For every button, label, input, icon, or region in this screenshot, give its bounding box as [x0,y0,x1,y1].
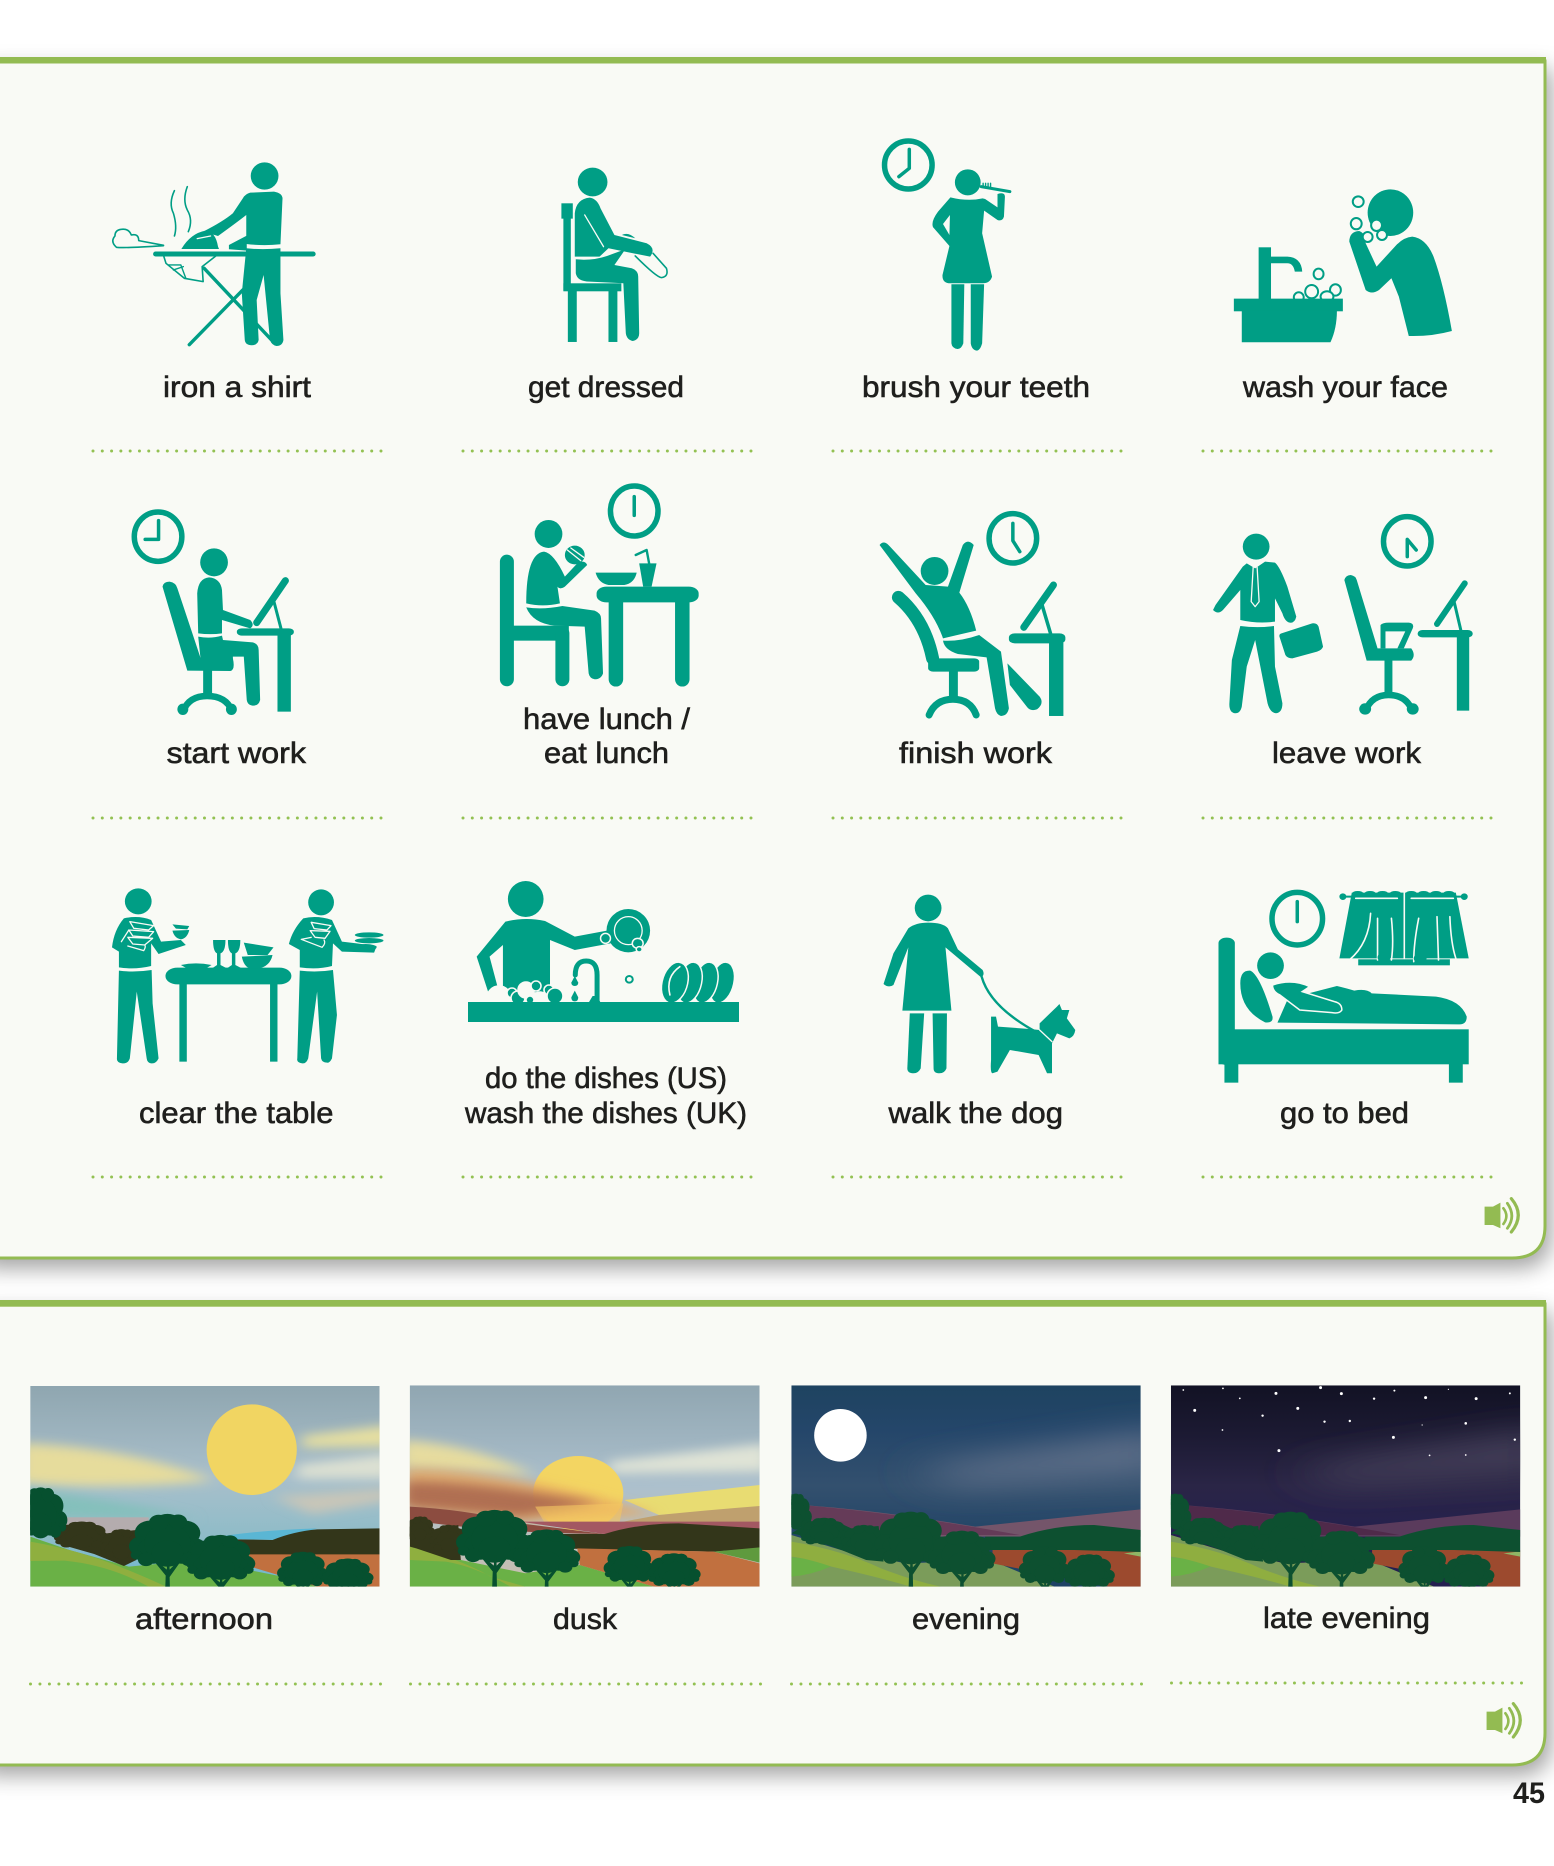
answer line [833,450,1122,452]
answer line [1203,450,1492,452]
icon: do the dishes [468,881,739,1022]
answer line [1203,816,1492,820]
label: do the dishes / wash the dishes [464,1062,747,1130]
label: wash your face: wash your face [1242,371,1448,404]
stars [1182,1386,1516,1456]
answer line [833,816,1122,820]
icon: walk the dog [884,895,1075,1073]
label: dusk: dusk [553,1603,618,1636]
answer line [1172,1682,1522,1684]
label: start work: start work [166,737,307,770]
answer line [792,1682,1142,1686]
answer line [833,1176,1122,1178]
panel top bar [0,1300,1546,1307]
label: late evening: late evening [1263,1602,1430,1635]
label: clear the table: clear the table [139,1097,334,1130]
icon: get dressed [561,168,667,342]
soapy dishes [487,981,563,1010]
counter [468,1002,739,1022]
answer line [93,816,382,820]
scene: afternoon [30,1386,380,1587]
label: brush your teeth: brush your teeth [862,371,1090,404]
icon: iron a shirt [113,162,313,346]
icon: speaker audio [1485,1199,1518,1232]
label: finish work: finish work [899,737,1053,770]
icon: clear the table [112,888,384,1063]
label: walk the dog: walk the dog [887,1097,1063,1130]
icon: leave work [1213,517,1473,715]
label: have lunch / eat lunch: have lunch / [523,703,691,736]
scene: late evening [1170,1385,1520,1587]
answer line [1203,1176,1492,1178]
icon: start work [134,512,294,715]
label: get dressed: get dressed [528,371,684,404]
label: iron a shirt: iron a shirt [163,371,312,404]
panel background [0,61,1545,1258]
icon: finish work [880,514,1065,716]
icon: have lunch [507,486,699,679]
label: afternoon: afternoon [135,1603,273,1636]
answer line [93,1176,382,1178]
panel: times of day [0,1300,1553,1765]
label: evening: evening [912,1603,1020,1636]
scene: dusk [410,1385,760,1587]
panel: daily activities [0,57,1546,1258]
answer line [463,1176,752,1178]
page number: 45 [1513,1777,1545,1810]
icon: wash your face [1234,189,1452,342]
label: do the dishes / wash the dishes: wash the dishes (UK) [464,1097,747,1130]
panel top bar [0,57,1546,64]
icon: speaker audio [1487,1704,1520,1737]
icon: go to bed [1218,891,1469,1083]
answer line [463,816,752,820]
answer line [93,450,382,452]
label: leave work: leave work [1272,737,1422,770]
panel background [0,1304,1545,1765]
label: do the dishes / wash the dishes: do the dishes (US) [485,1062,727,1095]
scene: evening [791,1385,1141,1587]
icon: brush your teeth [885,141,1010,351]
answer line [30,1682,381,1686]
answer line [463,450,752,452]
label: have lunch / eat lunch [523,703,691,770]
answer line [410,1682,761,1686]
label: have lunch / eat lunch: eat lunch [544,737,669,770]
label: go to bed: go to bed [1280,1097,1409,1130]
